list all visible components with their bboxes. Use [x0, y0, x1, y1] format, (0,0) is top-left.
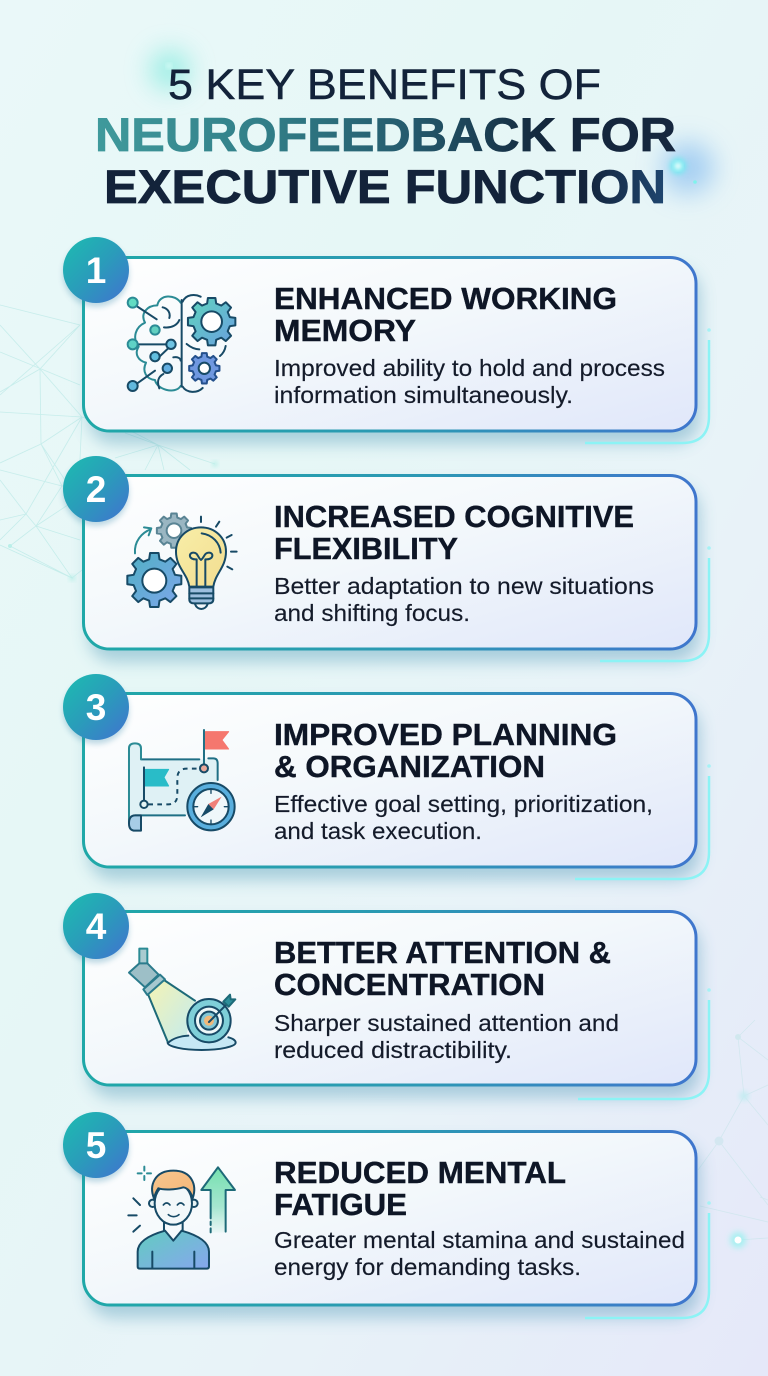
number badge 5: [63, 1112, 129, 1182]
heading 1: ENHANCED WORKING: [274, 282, 617, 316]
glowing node bottom right: [730, 1232, 746, 1248]
number badge 2: [63, 456, 129, 526]
description 1 line 2: information simultaneously.: [274, 382, 573, 408]
description 3 line 2: and task execution.: [274, 818, 482, 844]
number badge 4: [63, 893, 129, 963]
heading 2: INCREASED COGNITIVE: [274, 500, 634, 534]
heading 1 line 2: MEMORY: [274, 314, 416, 348]
right network pattern: [698, 1020, 768, 1240]
title line 1: 5 KEY BENEFITS OF: [168, 61, 601, 109]
description 3: Effective goal setting, prioritization,: [274, 791, 653, 817]
left network pattern: [0, 305, 218, 581]
glow: title right: [662, 142, 714, 194]
number badge 1: [63, 237, 129, 307]
panel: card 4: [63, 893, 711, 1099]
glow: top left: [150, 50, 190, 90]
icon: map, flags and compass: [129, 730, 235, 831]
description 5 line 2: energy for demanding tasks.: [274, 1254, 581, 1280]
heading 3 line 2: & ORGANIZATION: [274, 750, 545, 784]
panel: card 5: [63, 1112, 711, 1318]
icon: person with rising arrow: [128, 1167, 235, 1269]
number badge 1: 1: [86, 250, 106, 291]
heading 5 line 2: FATIGUE: [274, 1188, 407, 1222]
heading 5: REDUCED MENTAL: [274, 1156, 566, 1190]
panel: card 2: [63, 456, 711, 662]
heading 3: IMPROVED PLANNING: [274, 718, 617, 752]
panel: card 3: [63, 674, 711, 880]
description 1: Improved ability to hold and process: [274, 355, 665, 381]
description 2 line 2: and shifting focus.: [274, 600, 470, 626]
description 4: Sharper sustained attention and: [274, 1010, 619, 1036]
panel: card 1: [63, 237, 711, 444]
number badge 4: 4: [86, 906, 107, 947]
number badge 2: 2: [86, 469, 106, 510]
icon: spotlight and target: [129, 949, 236, 1050]
description 2: Better adaptation to new situations: [274, 573, 654, 599]
title line 3: EXECUTIVE FUNCTION: [104, 160, 666, 213]
title line 2: NEUROFEEDBACK FOR: [95, 108, 676, 161]
number badge 5: 5: [86, 1125, 106, 1166]
heading 4 line 2: CONCENTRATION: [274, 968, 545, 1002]
number badge 3: [63, 674, 129, 744]
title: [95, 61, 676, 213]
heading 2 line 2: FLEXIBILITY: [274, 532, 458, 566]
description 4 line 2: reduced distractibility.: [274, 1037, 512, 1063]
icon: brain with gears: [128, 295, 235, 392]
number badge 3: 3: [86, 687, 106, 728]
icon: gears and light bulb: [127, 514, 237, 609]
description 5: Greater mental stamina and sustained: [274, 1227, 685, 1253]
heading 4: BETTER ATTENTION &: [274, 936, 611, 970]
